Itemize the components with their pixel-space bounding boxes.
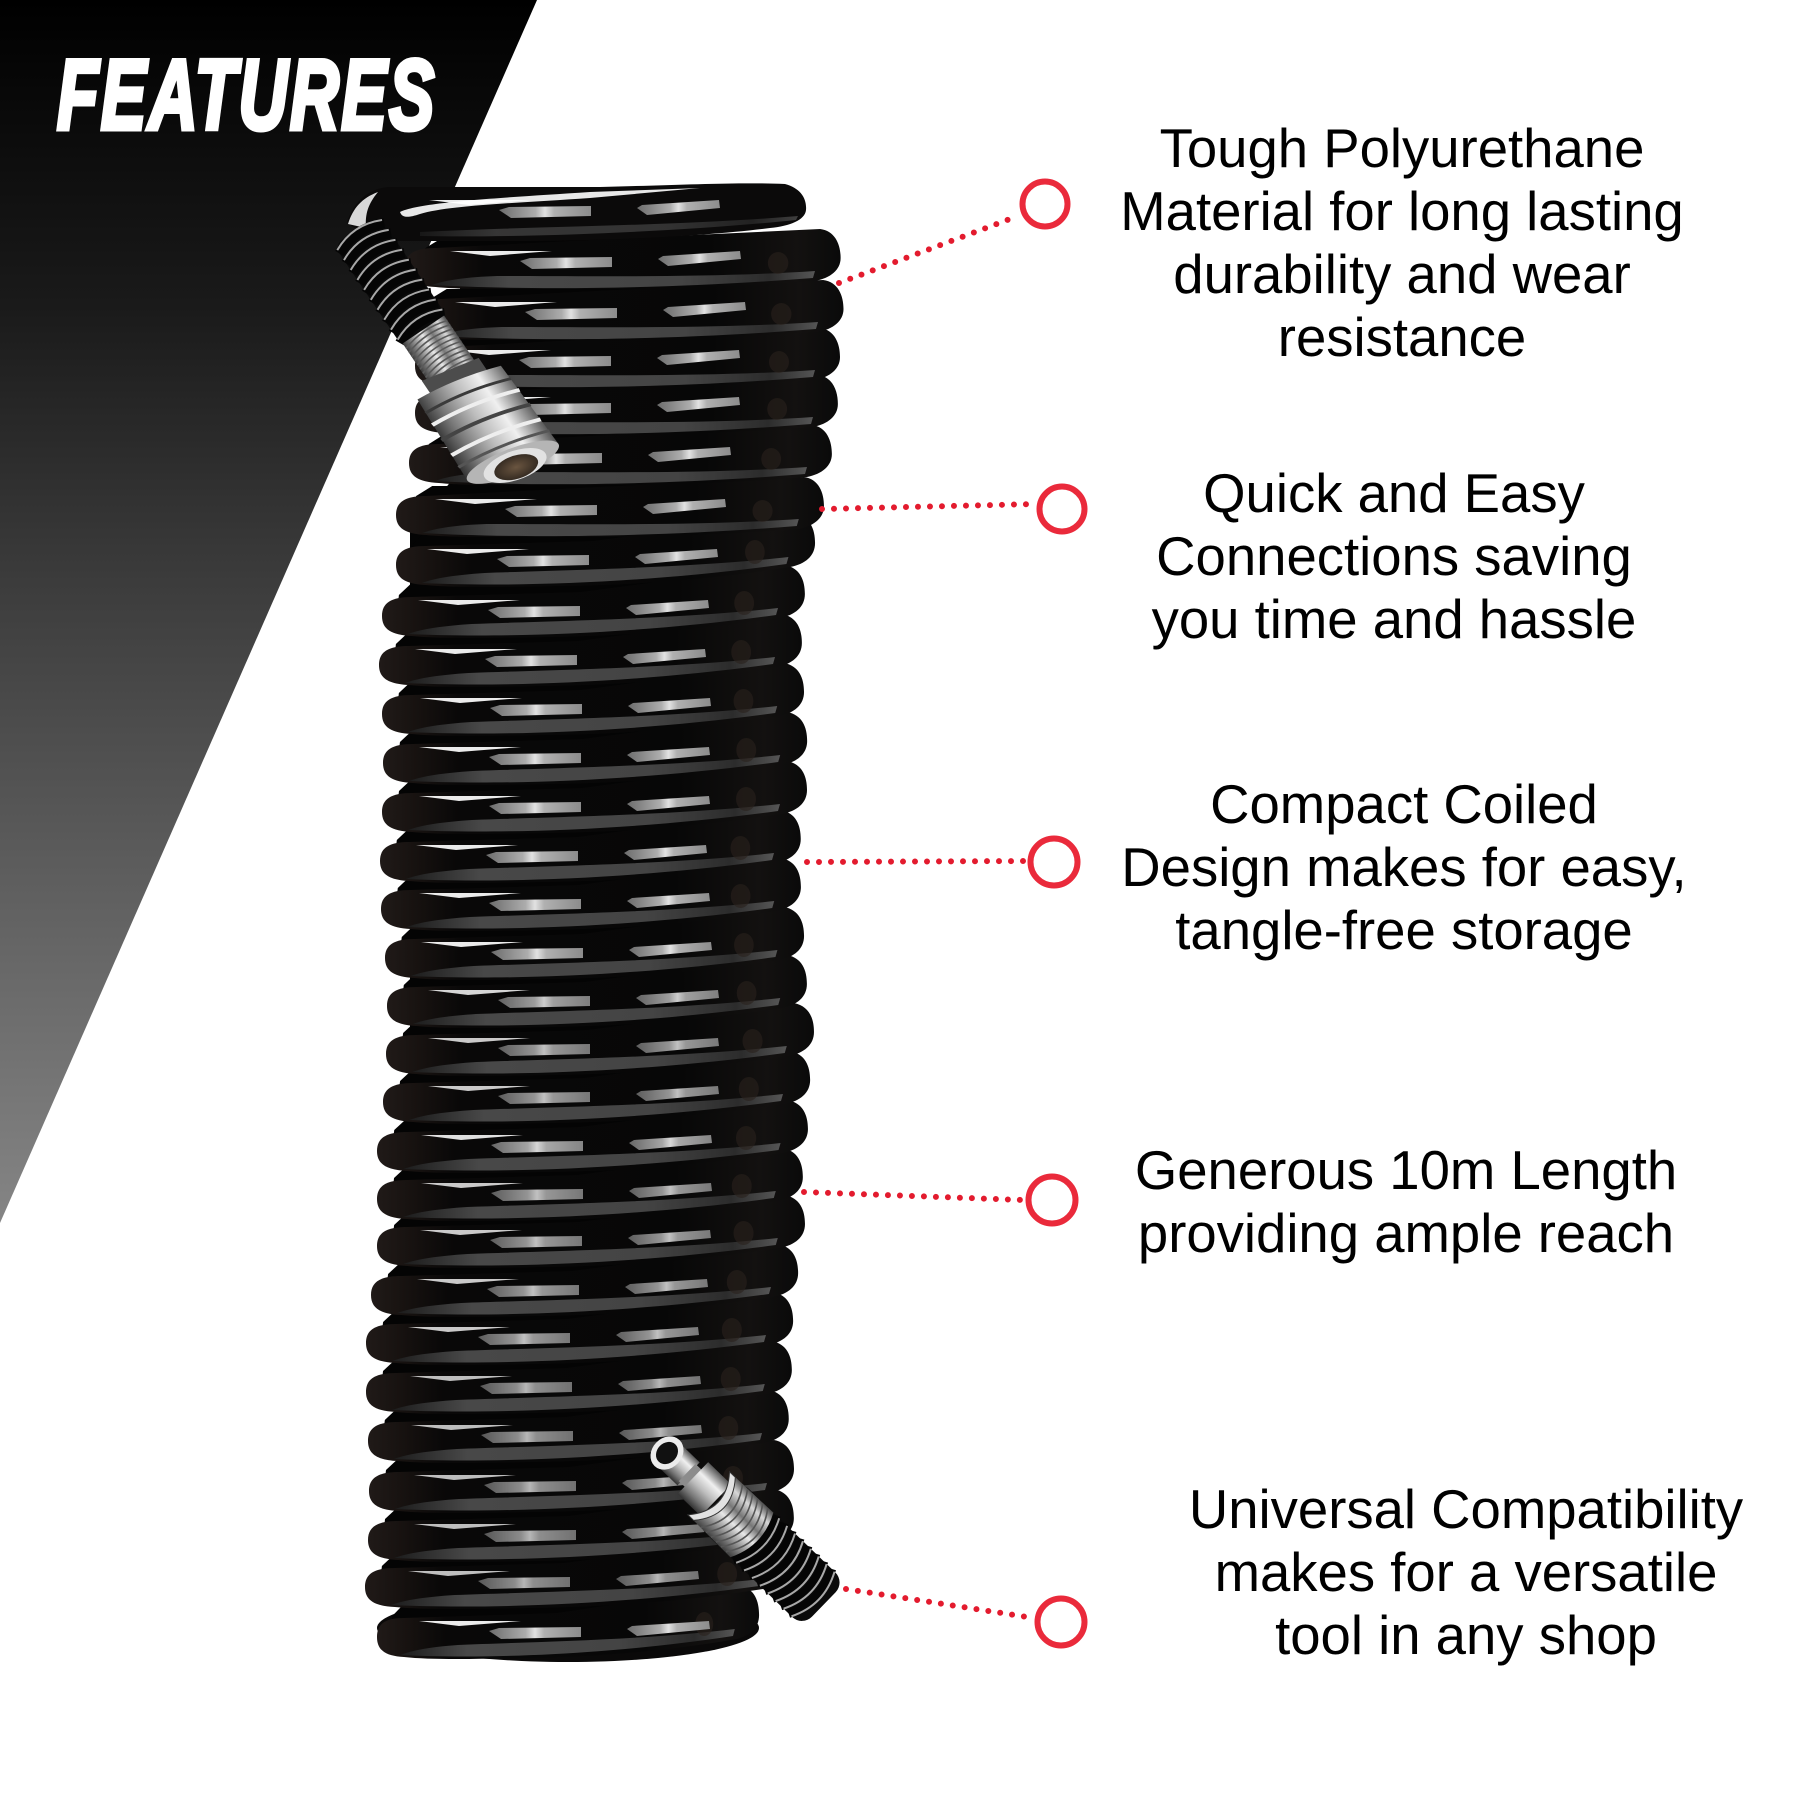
- text: 10m length feature: Generous 10m Length: [1135, 1140, 1677, 1201]
- callout 3: dotted leader and ring: [807, 838, 1078, 886]
- text: universal compatibility feature: [1189, 1479, 1744, 1666]
- text: quick connections feature: [1152, 463, 1636, 650]
- text: 10m length feature: providing ample reach: [1138, 1203, 1674, 1264]
- text: compact coiled design feature: Compact Coiled: [1210, 774, 1598, 835]
- text: polyurethane material feature: durability and wear: [1173, 244, 1631, 305]
- text: quick connections feature: Connections saving: [1156, 526, 1632, 587]
- text: 10m length feature: [1135, 1140, 1677, 1264]
- text: polyurethane material feature: Material for long lasting: [1120, 181, 1684, 242]
- callout 1: dotted leader and ring: [839, 182, 1068, 283]
- text: polyurethane material feature: [1120, 118, 1684, 368]
- text: compact coiled design feature: tangle-free storage: [1175, 900, 1633, 961]
- callout 5: dotted leader and ring: [846, 1589, 1084, 1646]
- callout 2: dotted leader and ring: [822, 486, 1084, 532]
- text: universal compatibility feature: makes for a versatile: [1215, 1542, 1717, 1603]
- text: compact coiled design feature: Design makes for easy,: [1121, 837, 1687, 898]
- text: compact coiled design feature: [1121, 774, 1687, 961]
- callout 4: dotted leader and ring: [804, 1176, 1076, 1224]
- panel: diagonal black-to-gray gradient header: [0, 0, 537, 1223]
- text: universal compatibility feature: Universal Compatibility: [1189, 1479, 1744, 1540]
- top female quick connector with spring guard: [316, 203, 569, 513]
- text: quick connections feature: Quick and Easy: [1203, 463, 1586, 524]
- text: quick connections feature: you time and hassle: [1152, 589, 1636, 650]
- text: polyurethane material feature: resistance: [1278, 307, 1526, 368]
- coiled black air hose: [347, 183, 844, 1662]
- text: polyurethane material feature: Tough Polyurethane: [1160, 118, 1644, 179]
- title: FEATURES: [57, 39, 437, 150]
- text: universal compatibility feature: tool in any shop: [1275, 1605, 1657, 1666]
- bottom male quick connector with spring guard: [635, 1420, 845, 1627]
